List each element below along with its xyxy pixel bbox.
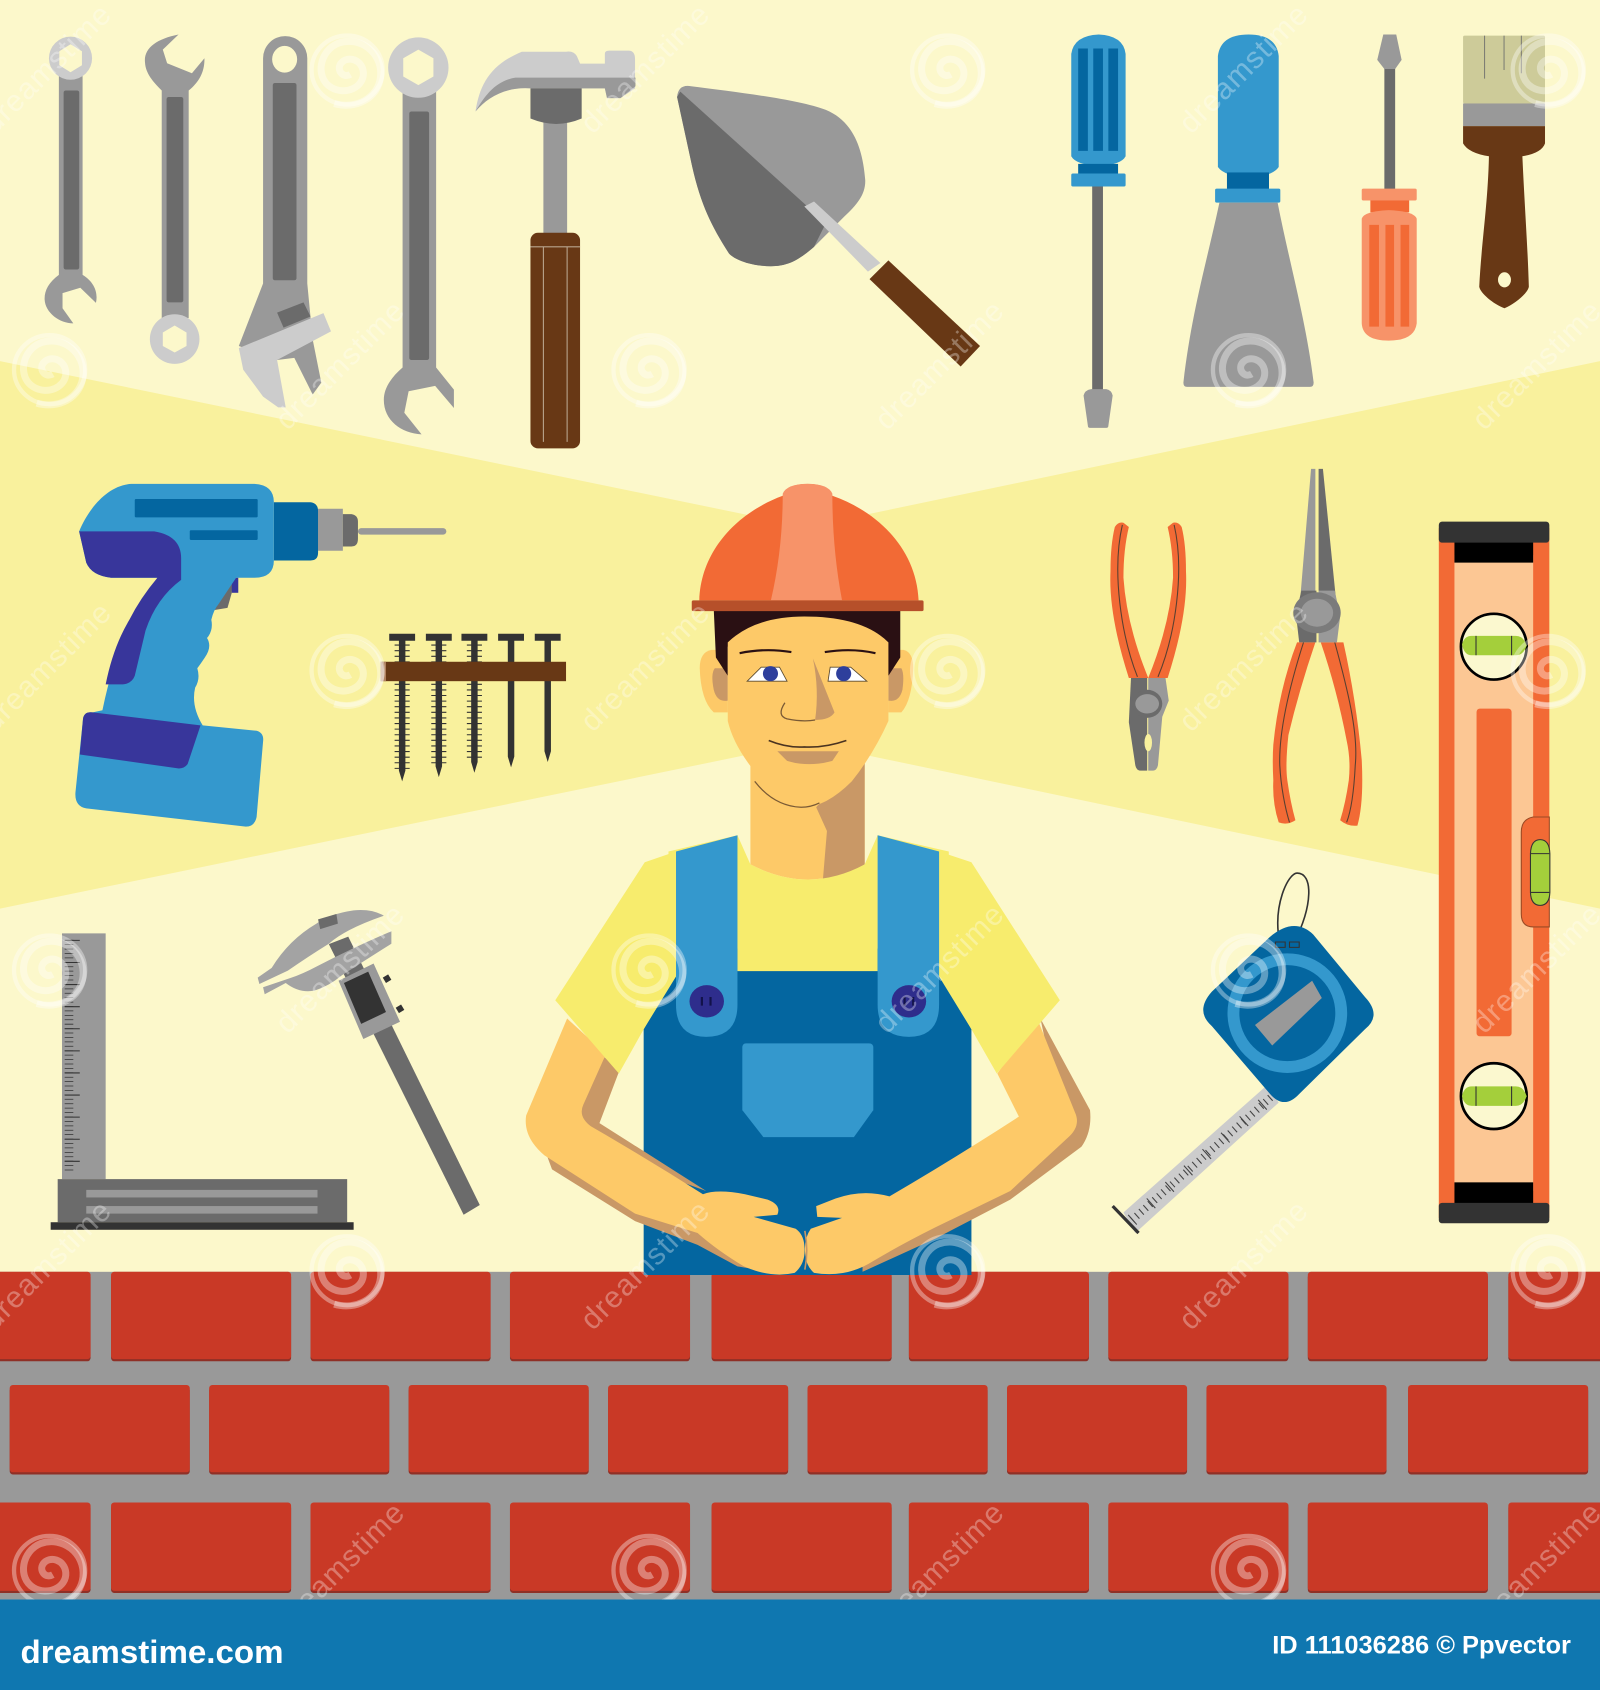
watermark text: dreamstime <box>1173 1194 1315 1336</box>
adjustable wrench <box>239 36 331 407</box>
mouth <box>769 740 846 764</box>
watermark text: dreamstime <box>869 294 1011 436</box>
right sleeve <box>939 851 1060 1073</box>
watermark text: dreamstime <box>869 1496 1011 1638</box>
overalls <box>644 948 971 1275</box>
left sleeve <box>555 851 676 1073</box>
watermark text: dreamstime <box>574 1194 717 1336</box>
footer logo text: dreamstime.com <box>20 1634 284 1670</box>
wrench 1 <box>45 37 97 323</box>
paint brush <box>1463 36 1545 308</box>
watermark text: dreamstime <box>574 596 717 738</box>
spirit level <box>1439 522 1550 1223</box>
right arm <box>805 1019 1090 1274</box>
ears <box>700 650 913 712</box>
watermark text: dreamstime <box>1173 0 1315 140</box>
tape measure <box>1113 873 1374 1233</box>
left arm <box>526 1019 805 1275</box>
orange screwdriver <box>1362 34 1417 341</box>
watermark text: dreamstime <box>869 898 1011 1040</box>
worker <box>526 484 1090 1275</box>
right strap <box>878 835 939 1037</box>
vernier caliper <box>258 910 480 1215</box>
eyes <box>740 650 875 681</box>
yellow light band <box>0 361 1600 909</box>
footer bar <box>0 1599 1600 1690</box>
nails and screws <box>381 634 566 781</box>
watermark text: dreamstime <box>269 1496 412 1638</box>
nose <box>781 659 835 721</box>
watermark text: dreamstime <box>1173 596 1315 738</box>
bottom vial <box>1461 1063 1527 1129</box>
top vial <box>1461 614 1527 680</box>
left strap <box>676 835 737 1037</box>
watermark text: dreamstime <box>269 294 412 436</box>
lineman pliers <box>1110 523 1186 771</box>
putty knife <box>1183 34 1314 387</box>
helmet <box>692 484 924 611</box>
trowel <box>677 86 980 366</box>
hair <box>714 609 900 676</box>
hammer <box>475 51 635 448</box>
watermark text: dreamstime <box>269 898 412 1040</box>
brick wall <box>0 1272 1600 1599</box>
neck <box>750 754 865 883</box>
needle nose pliers <box>1273 469 1362 826</box>
side vial <box>1521 817 1550 927</box>
watermark text: dreamstime <box>574 0 717 140</box>
strap buttons <box>689 985 926 1017</box>
t-shirt torso <box>668 835 949 981</box>
footer credit text: ID 111036286 © Ppvector <box>1272 1632 1571 1659</box>
wrench 2 <box>145 34 204 364</box>
wrench 4 <box>384 37 454 434</box>
face <box>728 617 888 807</box>
steel square ruler <box>51 933 354 1230</box>
blue screwdriver <box>1071 34 1126 428</box>
pocket <box>742 1043 873 1137</box>
cordless drill <box>75 484 446 827</box>
